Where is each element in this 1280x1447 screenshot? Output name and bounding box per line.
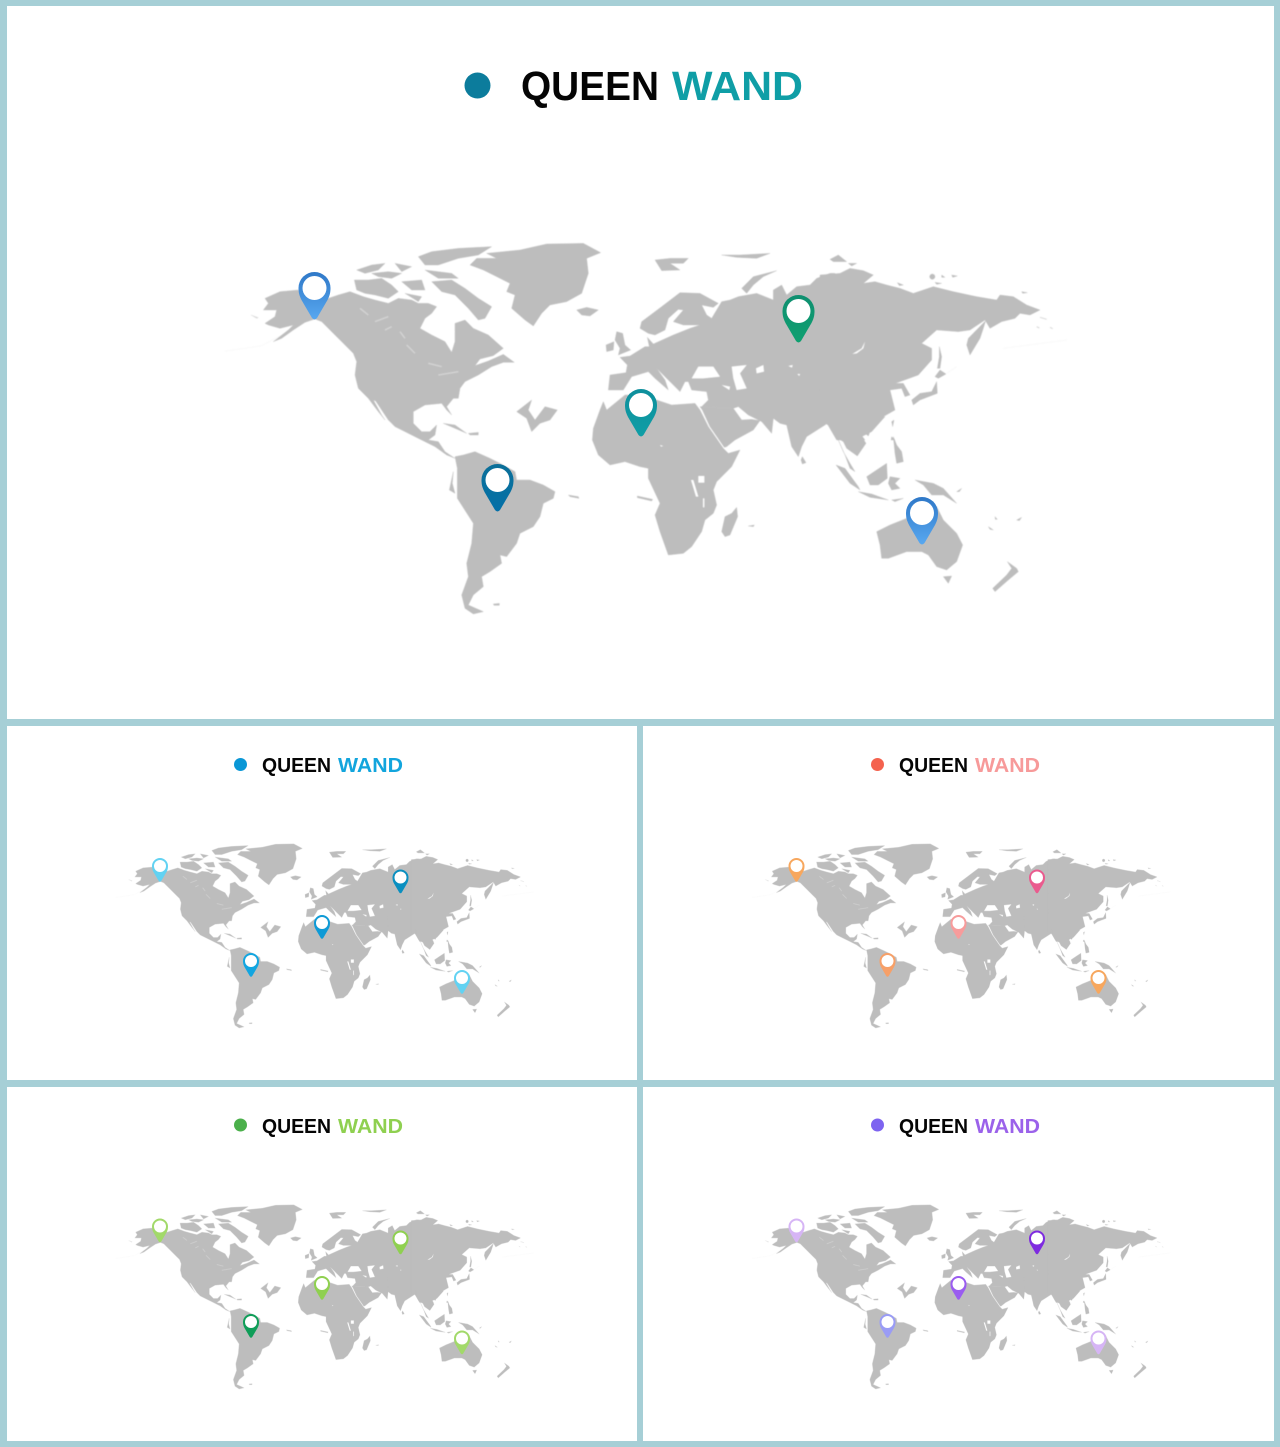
pin: Russia — [782, 295, 814, 342]
pin: Australia — [1090, 970, 1106, 994]
pin: Africa — [314, 915, 330, 939]
pin: Australia — [454, 1330, 470, 1354]
world map: main — [225, 243, 1067, 614]
pin: Alaska — [788, 858, 804, 882]
title: red: WAND — [975, 755, 1040, 777]
panel: red variant — [643, 726, 1274, 1080]
title: blue: QUEEN — [262, 755, 331, 777]
pin: Africa — [950, 1276, 966, 1300]
title: blue: WAND — [338, 755, 403, 777]
pin: Australia — [454, 970, 470, 994]
pin: Alaska — [298, 272, 330, 320]
title: main: WAND — [672, 63, 803, 109]
panel: green variant — [7, 1087, 637, 1441]
pin: Alaska — [152, 1218, 168, 1242]
world map: blue — [116, 844, 534, 1028]
title: purple — [871, 1116, 1040, 1138]
pin: Africa — [314, 1276, 330, 1300]
pin: Alaska — [788, 1218, 804, 1242]
title: blue — [234, 755, 403, 777]
panel: blue variant — [7, 726, 637, 1080]
pin: Australia — [1090, 1330, 1106, 1354]
title: red — [871, 755, 1040, 777]
pin: Brazil — [482, 464, 514, 512]
title: green: WAND — [338, 1116, 403, 1138]
panel: purple variant — [643, 1087, 1274, 1441]
title: main — [464, 63, 803, 109]
pin: Brazil — [880, 1314, 896, 1338]
title: red: QUEEN — [899, 755, 968, 777]
world map: green — [116, 1205, 534, 1389]
pin: Russia — [392, 1230, 408, 1254]
title: main: QUEEN — [521, 63, 659, 109]
pin: Africa — [950, 915, 966, 939]
title: green: QUEEN — [262, 1116, 331, 1138]
world map: purple — [752, 1205, 1170, 1389]
pin: Brazil — [243, 1314, 259, 1338]
title: purple: QUEEN — [899, 1116, 968, 1138]
pin: Africa — [625, 389, 657, 436]
pin: Australia — [906, 497, 938, 544]
pin: Russia — [392, 870, 408, 893]
pin: Brazil — [880, 953, 896, 977]
pin: Brazil — [243, 953, 259, 977]
pin: Russia — [1029, 870, 1045, 893]
pin: Russia — [1029, 1230, 1045, 1254]
title: green — [234, 1116, 403, 1138]
world map: red — [752, 844, 1170, 1028]
pin: Alaska — [152, 858, 168, 882]
panel: main map — [7, 6, 1274, 719]
title: purple: WAND — [975, 1116, 1040, 1138]
